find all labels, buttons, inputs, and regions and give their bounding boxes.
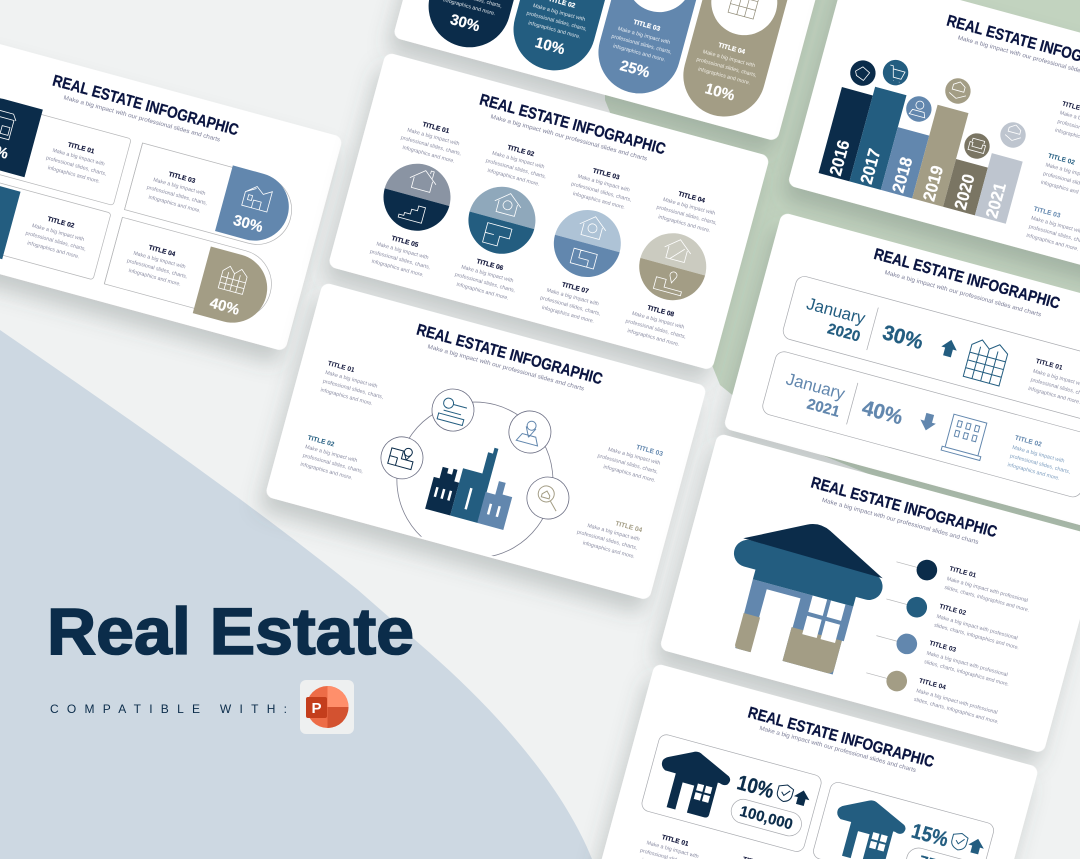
icon: magnifier bbox=[522, 472, 574, 524]
column 4: Make a big impact with bbox=[631, 311, 685, 331]
column 4: infographics and more. bbox=[657, 214, 711, 234]
column 2: professional slides, charts, bbox=[454, 272, 516, 294]
icon: armchair bbox=[961, 130, 993, 162]
row: January 2020: January bbox=[804, 294, 868, 328]
title: REAL ESTATE INFOGRAPHIC bbox=[809, 474, 999, 541]
box 3: Make a big impact with bbox=[153, 177, 206, 197]
text: title 04 bbox=[574, 511, 643, 560]
column 3: Make a big impact with bbox=[577, 174, 630, 194]
pill 4: professional slides, charts, bbox=[696, 57, 757, 79]
pill 2: 10% bbox=[533, 34, 567, 58]
icon: office block bbox=[941, 413, 990, 461]
item 2: Make a big impact with professional bbox=[936, 614, 1018, 642]
column 3: infographics and more. bbox=[541, 305, 595, 325]
item 2: slides, charts, infographics and more. bbox=[933, 622, 1020, 651]
icon: map bbox=[376, 432, 428, 484]
label: compatible with: COMPATIBLE WITH: bbox=[50, 702, 287, 716]
column 4: Make a big impact with bbox=[662, 197, 716, 217]
box 4 bbox=[103, 217, 279, 331]
icon: PowerPoint: P bbox=[311, 700, 322, 717]
item 2 bbox=[882, 589, 1025, 651]
text: title 04: Make a big impact with bbox=[587, 523, 640, 543]
icon: hand and house bbox=[942, 75, 974, 107]
column 2: infographics and more. bbox=[456, 282, 509, 302]
box 1: infographics and more. bbox=[47, 165, 101, 185]
item 1 bbox=[892, 552, 1035, 614]
item 4: Make a big impact with professional bbox=[916, 688, 998, 716]
column 1: Make a big impact with bbox=[376, 241, 429, 261]
text: title 01: TITLE 01 bbox=[327, 360, 356, 374]
pill 4: Make a big impact with bbox=[702, 49, 756, 69]
slide: four stat boxes (left) bbox=[0, 33, 343, 352]
item 4: slides, charts, infographics and more. bbox=[913, 697, 999, 726]
pill 4: infographics and more. bbox=[697, 67, 751, 86]
text: title 01: Make a big impact with bbox=[324, 370, 378, 390]
subtitle: Make a big impact with our professional slides and charts bbox=[884, 270, 1042, 318]
text: title 01: infographics and more. bbox=[1027, 386, 1080, 406]
title: REAL ESTATE INFOGRAPHIC bbox=[415, 322, 605, 388]
bar chart: 2019 bbox=[919, 164, 947, 203]
box 3: TITLE 03 bbox=[168, 171, 196, 185]
pill 2: professional slides, charts, bbox=[526, 11, 588, 33]
bar chart: 2020 bbox=[951, 172, 979, 212]
pill 4: 10% bbox=[703, 80, 736, 105]
icon: cart bbox=[880, 57, 911, 88]
bar chart bbox=[819, 78, 1031, 224]
text: title 01 bbox=[637, 829, 706, 859]
text: title 02: infographics and more. bbox=[300, 462, 353, 481]
bar chart: 2021 bbox=[982, 181, 1010, 220]
text: title 04: professional slides, charts, bbox=[576, 529, 638, 552]
subtitle: Make a big impact with our professional slides and charts bbox=[759, 726, 917, 774]
subtitle: Make a big impact with our professional slides and charts bbox=[427, 344, 585, 393]
column 4: infographics and more. bbox=[627, 328, 680, 348]
box 2: professional slides, charts, bbox=[25, 231, 87, 253]
box 1: professional slides, charts, bbox=[45, 155, 107, 177]
stat box 1 bbox=[640, 733, 823, 853]
ring bbox=[396, 402, 554, 556]
bar chart: 2018 bbox=[889, 155, 916, 195]
pill 2: Make a big impact with bbox=[532, 3, 586, 23]
text: title 02: TITLE 02 bbox=[1014, 435, 1043, 449]
column 2: professional slides, charts, bbox=[485, 158, 547, 180]
text: title 01: TITLE 01 bbox=[661, 834, 690, 848]
icon: apartment block bbox=[728, 0, 760, 19]
pill 3: professional slides, charts, bbox=[611, 34, 672, 56]
row: January 2021 bbox=[761, 350, 1080, 499]
text: title 02 bbox=[1040, 153, 1080, 202]
column 1: professional slides, charts, bbox=[369, 249, 431, 271]
pill 3: Make a big impact with bbox=[617, 26, 671, 46]
column 3: TITLE 07 bbox=[561, 281, 590, 295]
icon: shield bbox=[950, 831, 969, 852]
column 2: Make a big impact with bbox=[460, 264, 514, 284]
pill 1 bbox=[419, 0, 554, 57]
slide: split circles (centre) bbox=[328, 52, 770, 371]
slide: circular diagram bbox=[263, 282, 707, 608]
column 4: professional slides, charts, bbox=[625, 318, 687, 340]
icon: arrow up bbox=[792, 788, 812, 807]
box 3: infographics and more. bbox=[148, 195, 201, 214]
column 1: professional slides, charts, bbox=[400, 135, 462, 157]
icon: arrow up bbox=[939, 338, 959, 358]
pill 4 bbox=[674, 0, 809, 126]
box 1 bbox=[0, 90, 133, 205]
title: REAL ESTATE INFOGRAPHIC bbox=[51, 73, 241, 139]
column 3: infographics and more. bbox=[572, 191, 626, 211]
column 2: Make a big impact with bbox=[491, 150, 545, 170]
text: title 04: TITLE 04 bbox=[614, 520, 643, 534]
icon: shield bbox=[775, 783, 794, 803]
stat box 1: 100,000 bbox=[738, 803, 795, 833]
text: title 03: TITLE 03 bbox=[1033, 206, 1061, 220]
pill 2 bbox=[504, 0, 639, 80]
text: title 03 bbox=[1026, 206, 1080, 255]
icon: PowerPoint bbox=[300, 680, 354, 734]
icon: navy house bbox=[651, 744, 735, 821]
text: title 02: TITLE 02 bbox=[1047, 153, 1076, 167]
column 4: TITLE 04 bbox=[677, 191, 706, 205]
column 4: professional slides, charts, bbox=[656, 204, 718, 227]
column 2: infographics and more. bbox=[487, 168, 540, 188]
text: title 03: Make a big impact with bbox=[607, 447, 661, 467]
text: title 03: professional slides, charts, bbox=[597, 453, 659, 475]
column 3 bbox=[535, 162, 639, 327]
row: January 2020 bbox=[781, 274, 1080, 425]
text: title 02: Make a big impact with bbox=[1011, 445, 1065, 465]
column 1 bbox=[364, 116, 469, 280]
box 1: TITLE 01 bbox=[67, 142, 95, 156]
text: title 02: professional slides, charts, bbox=[1009, 453, 1071, 476]
slide: January comparison bbox=[723, 212, 1080, 533]
column 3: TITLE 03 bbox=[592, 168, 621, 182]
icon: hand bbox=[997, 119, 1029, 151]
icon: apartment bbox=[963, 338, 1009, 386]
pill 3: 25% bbox=[618, 57, 652, 81]
text: title 02: professional slides, charts, bbox=[302, 453, 364, 475]
text: title 01 bbox=[1027, 358, 1080, 408]
column 4 bbox=[620, 186, 725, 350]
box 3 bbox=[124, 141, 300, 252]
heading: Real Estate: Real Estate bbox=[47, 594, 414, 668]
row: January 2021: 40% bbox=[860, 396, 905, 429]
item 1: slides, charts, infographics and more. bbox=[944, 585, 1030, 614]
box 3: professional slides, charts, bbox=[146, 185, 208, 207]
column 3: professional slides, charts, bbox=[570, 181, 632, 203]
text: title 02: TITLE 02 bbox=[307, 435, 335, 449]
column 4: TITLE 08 bbox=[646, 305, 675, 319]
pill 3 bbox=[589, 0, 724, 103]
pill 1: 30% bbox=[448, 11, 482, 35]
icon: agent bbox=[903, 93, 934, 125]
slide: house diagram bbox=[659, 433, 1080, 754]
row: January 2020: 2020 bbox=[825, 320, 862, 346]
text: title 02: Make a big impact with bbox=[304, 444, 358, 464]
column 1: TITLE 01 bbox=[422, 121, 450, 135]
pill 3: infographics and more. bbox=[612, 43, 666, 63]
item 1: Make a big impact with professional bbox=[946, 576, 1028, 604]
icon: keys bbox=[427, 384, 479, 436]
column 2: TITLE 02 bbox=[507, 144, 535, 158]
slide: pill columns (top) bbox=[393, 0, 835, 142]
title: REAL ESTATE INFOGRAPHIC bbox=[746, 704, 936, 771]
row: January 2021: 2021 bbox=[805, 396, 842, 421]
box 3: 30% bbox=[231, 212, 265, 236]
text: title 04: infographics and more. bbox=[582, 540, 635, 560]
column 1: infographics and more. bbox=[371, 259, 424, 279]
text: title 03: infographics and more. bbox=[1026, 233, 1079, 253]
box 4: TITLE 04 bbox=[148, 244, 176, 258]
box 4: Make a big impact with bbox=[133, 251, 186, 270]
item 4 bbox=[862, 663, 1005, 726]
item 3 bbox=[872, 626, 1015, 688]
box 1: Make a big impact with bbox=[52, 148, 105, 168]
text: title 01 bbox=[1054, 101, 1080, 150]
item 3: slides, charts, infographics and more. bbox=[923, 659, 1010, 688]
slide: house statistics (bottom) bbox=[596, 663, 1039, 859]
box 2: infographics and more. bbox=[27, 240, 80, 260]
icon: arrow up bbox=[967, 837, 986, 855]
icon: map pin bbox=[504, 406, 556, 458]
text: title 02: infographics and more. bbox=[1007, 462, 1060, 482]
title: REAL ESTATE INFOGRAPHIC bbox=[478, 92, 668, 158]
item 3: TITLE 03 bbox=[928, 640, 957, 654]
subtitle: Make a big impact with our professional slides and charts bbox=[490, 114, 648, 163]
box 4: professional slides, charts, bbox=[126, 258, 188, 280]
box 4: infographics and more. bbox=[128, 268, 181, 288]
stat box 2: 15% bbox=[909, 820, 951, 852]
row: January 2021: January bbox=[784, 369, 847, 404]
text: title 02 bbox=[1007, 435, 1076, 484]
house illustration bbox=[710, 505, 894, 681]
subtitle: Make a big impact with our professional slides and charts bbox=[63, 95, 221, 144]
blue curved backdrop bbox=[0, 330, 592, 859]
text: title 03: infographics and more. bbox=[603, 464, 656, 484]
box 2 bbox=[0, 169, 111, 284]
item 2: TITLE 02 bbox=[938, 603, 967, 617]
text: title 02 bbox=[300, 435, 369, 484]
box 2: Make a big impact with bbox=[31, 223, 85, 243]
column 1: TITLE 05 bbox=[391, 235, 419, 249]
row: January 2020: 30% bbox=[880, 321, 926, 354]
column 2: TITLE 06 bbox=[476, 258, 504, 272]
box 4: 40% bbox=[208, 295, 241, 319]
item 1: TITLE 01 bbox=[949, 566, 977, 580]
text: title 03 bbox=[594, 435, 664, 484]
green backdrop bbox=[605, 0, 1080, 560]
column 2 bbox=[449, 139, 554, 303]
bar chart: 2016 bbox=[826, 138, 854, 178]
icon: handshake bbox=[847, 57, 878, 89]
column 3: Make a big impact with bbox=[546, 288, 599, 308]
subtitle: Make a big impact with our professional slides and charts bbox=[821, 498, 979, 546]
pill 4: TITLE 04 bbox=[717, 42, 746, 56]
pill 3: TITLE 03 bbox=[632, 19, 661, 33]
icon: teal house bbox=[826, 792, 911, 859]
stat box 1: 10% bbox=[735, 771, 777, 803]
text: title 01 bbox=[320, 360, 389, 409]
pill 2: infographics and more. bbox=[527, 20, 581, 40]
column 1: Make a big impact with bbox=[406, 127, 460, 147]
text: title 01: infographics and more. bbox=[320, 387, 373, 407]
slide: year bar chart bbox=[787, 0, 1080, 290]
text: title 01: TITLE 01 bbox=[1035, 358, 1064, 372]
column 3: professional slides, charts, bbox=[539, 295, 601, 317]
item 4: TITLE 04 bbox=[918, 678, 947, 692]
text: title 01: professional slides, charts, bbox=[322, 379, 384, 401]
column 1: infographics and more. bbox=[402, 145, 455, 165]
icon: arrow down bbox=[918, 412, 938, 432]
text: title 03: TITLE 03 bbox=[635, 444, 664, 458]
item 3: Make a big impact with professional bbox=[926, 650, 1008, 678]
bar chart: 2017 bbox=[857, 146, 885, 186]
skyline bbox=[425, 434, 523, 530]
stat box 2 bbox=[812, 781, 995, 859]
box 2: TITLE 02 bbox=[47, 216, 75, 230]
